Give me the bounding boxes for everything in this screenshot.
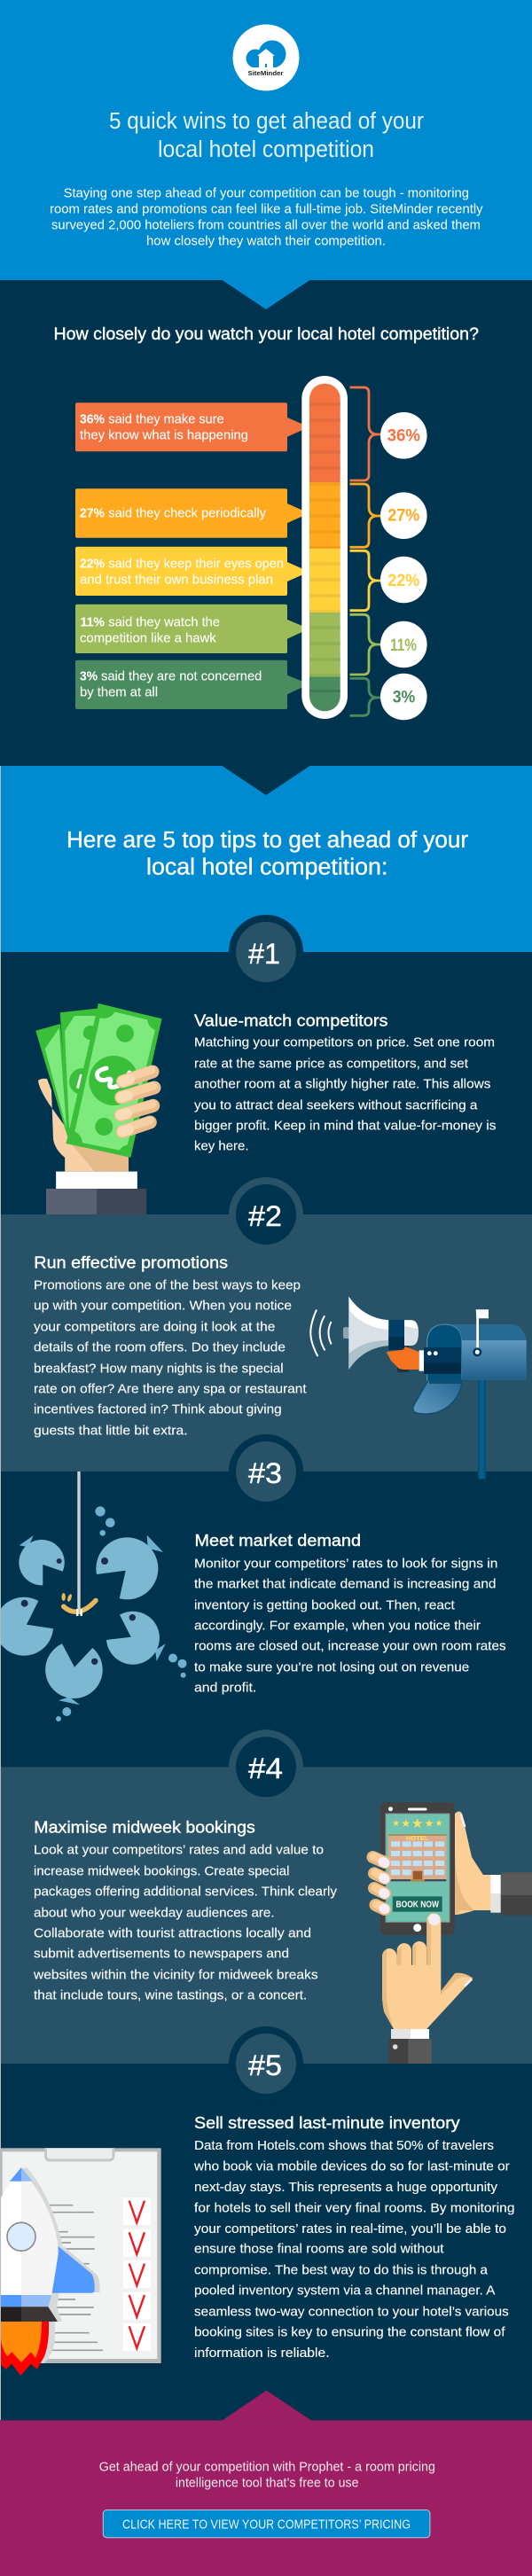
tip 5 text: Data from Hotels.com shows that 50% of travelers (194, 2138, 494, 2153)
tip 5 text: information is reliable. (194, 2346, 330, 2361)
icon: hands with phone: ★ (392, 1819, 400, 1829)
tip 5 text: pooled inventory system via a channel manager. A (194, 2283, 495, 2299)
badge: #5: #5 (248, 2049, 282, 2081)
arrow: header pointer (223, 280, 309, 309)
tip 3 text: accordingly. For example, when you notice their (194, 1618, 481, 1633)
tip 3 text: and profit. (194, 1680, 256, 1695)
tip 4 text: increase midweek bookings. Create special (34, 1863, 289, 1878)
tip 3 text: the market that indicate demand is increasing and (194, 1576, 497, 1591)
panel: header (0, 0, 532, 280)
badge: #3 (229, 1434, 303, 1509)
tip 5 text: ensure those final rooms are sold without (194, 2242, 444, 2257)
tip 2 text: your competitors are doing it look at the (34, 1319, 275, 1334)
intro text: Staying one step ahead of your competition can be tough - monitoring (64, 187, 469, 201)
title (109, 109, 424, 162)
callout: 3%: 3% (80, 668, 98, 683)
badge: 11%: 11% (390, 636, 417, 655)
callout: 22% (75, 547, 309, 596)
button: view competitors' pricing (103, 2510, 430, 2538)
arrow: survey pointer (223, 766, 309, 795)
tip 4 text: packages offering additional services. Think clearly (34, 1884, 337, 1899)
tip 1 text (194, 1035, 497, 1154)
tip 4 text: Look at your competitors’ rates and add value to (34, 1842, 324, 1857)
badge: 22%: 22% (387, 572, 419, 590)
icon: hands with phone: ★ (425, 1817, 434, 1830)
intro text: surveyed 2,000 hoteliers from countries all over the world and asked them (51, 219, 481, 233)
tip 2 text: guests that little bit extra. (34, 1423, 188, 1438)
icon: hands with phone: ★ (435, 1819, 443, 1829)
title: local hotel competition (158, 137, 374, 162)
badge: #2 (229, 1177, 303, 1252)
icon: megaphone and mailbox (310, 1297, 527, 1479)
callout: 3%: by them at all (80, 684, 158, 699)
panel: tip 3 (0, 1434, 532, 1767)
tip 4 text: about who your weekday audiences are. (34, 1905, 275, 1920)
survey heading: How closely do you watch your local hotel competition? (53, 324, 479, 344)
footer text: Get ahead of your competition with Prophet - a room pricing (99, 2460, 435, 2474)
intro text (50, 187, 483, 249)
tips heading (66, 828, 469, 880)
badge: 36%: 36% (387, 427, 420, 446)
tip 5 text: who book via mobile devices do so for last-minute or (193, 2159, 510, 2174)
intro text: how closely they watch their competition. (146, 235, 386, 249)
tip 3 text (194, 1556, 506, 1695)
tip 3 heading: Meet market demand (195, 1531, 361, 1550)
tip 4 text: websites within the vicinity for midweek breaks (33, 1967, 318, 1982)
tip 2 text: incentives factored in? Think about giving (34, 1401, 282, 1417)
brace: 11% (349, 614, 384, 675)
brace: 22% (349, 550, 384, 611)
tip 5 text (193, 2138, 514, 2361)
badge: 27% (380, 492, 427, 539)
title: 5 quick wins to get ahead of your (109, 109, 424, 134)
footer text: intelligence tool that’s free to use (176, 2476, 358, 2490)
chart: thermometer (301, 376, 348, 719)
panel: tip 1 (35, 915, 496, 1214)
icon: hands with phone: ★ (411, 1815, 423, 1831)
intro text: room rates and promotions can feel like a full-time job. SiteMinder recently (50, 203, 483, 217)
tip 1 text: another room at a slightly higher rate. This allows (194, 1077, 490, 1092)
tip 5 text: next-day stays. This represents a huge opportunity (194, 2180, 498, 2195)
tip 1 heading: Value-match competitors (194, 1011, 387, 1030)
tip 1 text: you to attract deal seekers without sacrificing a (194, 1098, 478, 1113)
tip 4 text (33, 1842, 337, 2002)
callout: 11% (75, 605, 309, 653)
icon: hand holding money (35, 1003, 161, 1214)
tip 2 text: breakfast? How many nights is the special (34, 1361, 284, 1376)
callout: 27%: 27% (80, 505, 105, 520)
brace: 3% (349, 678, 384, 715)
icon: hands with phone (372, 1802, 532, 2064)
icon: rocket and checklist (0, 2148, 162, 2376)
icon: fish and hook (0, 1471, 186, 1721)
tips heading: Here are 5 top tips to get ahead of your (66, 828, 469, 853)
panel: footer call to action (0, 2391, 532, 2576)
button: book now (393, 1896, 442, 1912)
icon: hands with phone: HOTEL (406, 1834, 429, 1842)
tip 4 text: Collaborate with tourist attractions locally and (34, 1925, 311, 1940)
panel: tips intro (0, 766, 532, 952)
tip 4 text: that include tours, wine tastings, or a concert. (34, 1987, 307, 2002)
callout: 11%: competition like a hawk (80, 630, 216, 645)
callout: 36%: 36% (80, 411, 105, 426)
tip 2 text: Promotions are one of the best ways to keep (34, 1277, 301, 1292)
callout: 22%: 22% (80, 556, 105, 571)
icon: SiteMinder logo: SiteMinder (248, 69, 284, 77)
tip 2 heading: Run effective promotions (34, 1253, 228, 1272)
icon: SiteMinder logo (232, 25, 300, 90)
callout: 22%: and trust their own business plan (80, 572, 273, 587)
badge: #4 (229, 1729, 303, 1804)
callout: 22%: said they keep their eyes open (108, 556, 284, 571)
tip 2 text: up with your competition. When you notice (34, 1298, 292, 1313)
callout: 36% (75, 402, 309, 451)
callout: 3% (75, 660, 309, 709)
badge: 22% (380, 557, 427, 603)
badge: #1: #1 (248, 938, 280, 970)
tip 5 text: booking sites is key to ensuring the constant flow of (194, 2325, 505, 2340)
tip 3 text: rooms are closed out, increase your own room rates (194, 1638, 506, 1653)
badge: 3%: 3% (393, 689, 415, 707)
tip 5 text: compromise. The best way to do this is through a (194, 2262, 489, 2278)
brace: 27% (349, 484, 384, 547)
badge: 3% (380, 674, 427, 720)
button: view competitors' pricing: CLICK HERE TO VIEW YOUR COMPETITORS’ PRICING (122, 2517, 411, 2532)
badge: 36% (380, 412, 427, 459)
panel: tip 5 (0, 2026, 532, 2420)
tip 4 text: submit advertisements to newspapers and (34, 1946, 289, 1961)
tip 3 text: Monitor your competitors’ rates to look for signs in (194, 1556, 497, 1571)
badge: #3: #3 (248, 1457, 282, 1489)
tip 1 text: rate at the same price as competitors, and set (194, 1057, 469, 1072)
icon: hands with phone: ★ (401, 1817, 411, 1830)
arrow: footer pointer (223, 2391, 311, 2420)
tip 3 text: inventory is getting booked out. Then, react (194, 1597, 456, 1612)
panel: tip 2 (0, 1177, 532, 1471)
tip 5 heading: Sell stressed last-minute inventory (194, 2113, 460, 2132)
tip 1 text: Matching your competitors on price. Set one room (194, 1035, 495, 1050)
panel: tip 4 (0, 1729, 532, 2064)
badge: #1 (229, 915, 303, 989)
callout: 27% (75, 488, 309, 538)
brace: 36% (349, 387, 384, 480)
tip 2 text (34, 1277, 307, 1438)
callout: 36%: said they make sure (108, 411, 224, 426)
tip 5 text: seamless two-way connection to your hotel’s various (194, 2305, 509, 2319)
callout: 3%: said they are not concerned (101, 668, 262, 683)
footer text (99, 2460, 435, 2490)
badge: 27%: 27% (387, 507, 419, 526)
tip 1 text: key here. (194, 1139, 248, 1154)
tip 1 text: bigger profit. Keep in mind that value-for-money is (194, 1119, 497, 1134)
callout: 27%: said they check periodically (108, 505, 266, 520)
button: book now: BOOK NOW (395, 1901, 439, 1909)
callout: 11%: 11% (80, 614, 105, 629)
tip 3 text: to make sure you’re not losing out on revenue (194, 1659, 469, 1674)
tip 2 text: rate on offer? Are there any spa or restaurant (34, 1381, 307, 1396)
badge: #2: #2 (248, 1200, 282, 1232)
tip 5 text: for hotels to sell their very final rooms. By monitoring (194, 2201, 514, 2216)
badge: 11% (380, 621, 427, 667)
tip 4 heading: Maximise midweek bookings (34, 1818, 255, 1837)
tip 5 text: your competitors’ rates in real-time, you’ll be able to (194, 2221, 506, 2236)
tip 2 text: details of the room offers. Do they include (34, 1339, 286, 1354)
badge: #5 (229, 2026, 303, 2101)
badge: #4: #4 (248, 1752, 283, 1784)
callout: 11%: said they watch the (108, 614, 220, 629)
panel: survey (55, 280, 479, 720)
callout: 36%: they know what is happening (80, 427, 248, 442)
tips heading: local hotel competition: (146, 855, 387, 880)
